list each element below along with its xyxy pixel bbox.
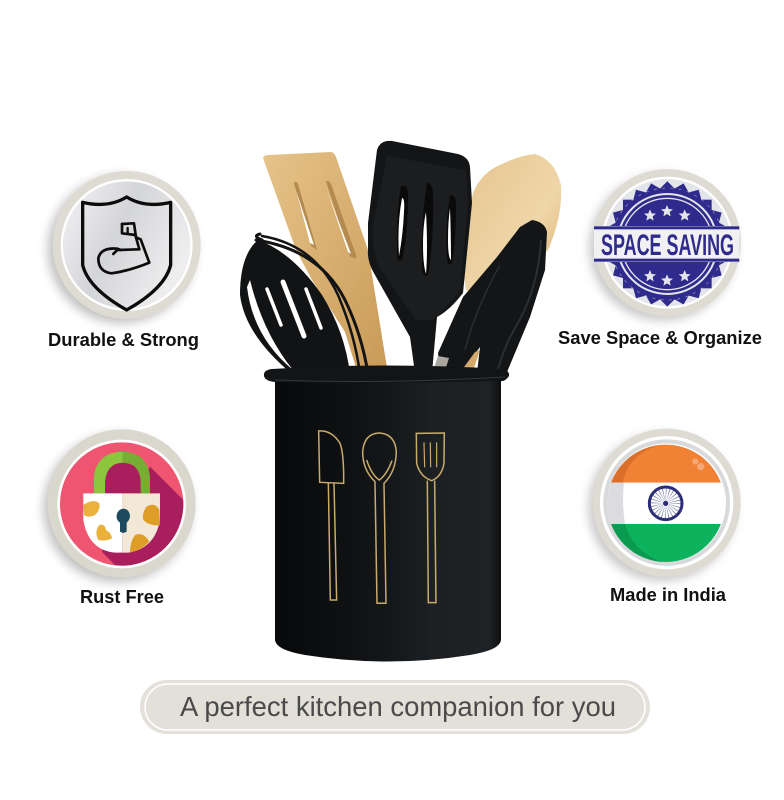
label: durable and strong: Durable & Strong: [48, 330, 199, 350]
stamp band: [594, 226, 739, 262]
product: black slotted turner: [368, 141, 472, 373]
product: black utensil holder pot: [264, 366, 509, 662]
panel: made in india: [588, 429, 741, 605]
gold utensil icons: [319, 431, 444, 603]
panel: durable and strong: [48, 171, 201, 350]
badge: durable shield: [48, 171, 201, 323]
callout: tagline pill: [140, 680, 650, 734]
panel: save space and organize: [558, 169, 762, 348]
label: save space and organize: Save Space & Organize: [558, 328, 762, 348]
icon: shield with flexed arm: [83, 197, 171, 310]
ashoka chakra: [649, 487, 682, 520]
badge: indian flag: [588, 429, 741, 581]
badge: padlock with rust: [43, 429, 196, 582]
product: wooden slotted spatula: [263, 152, 388, 374]
stamp teeth: [605, 181, 730, 307]
tagline text: A perfect kitchen companion for you: [180, 691, 616, 722]
panel: rust free: [43, 429, 196, 607]
product: wooden spoon: [464, 154, 561, 300]
pot rim: [264, 366, 509, 383]
product: black tongs: [432, 220, 547, 374]
badge: space saving stamp: [589, 169, 741, 321]
label: rust free: Rust Free: [80, 587, 164, 607]
label: made in india: Made in India: [610, 585, 727, 605]
product: black whisk and slotted spoon: [240, 234, 368, 374]
stamp stars: [644, 205, 691, 286]
